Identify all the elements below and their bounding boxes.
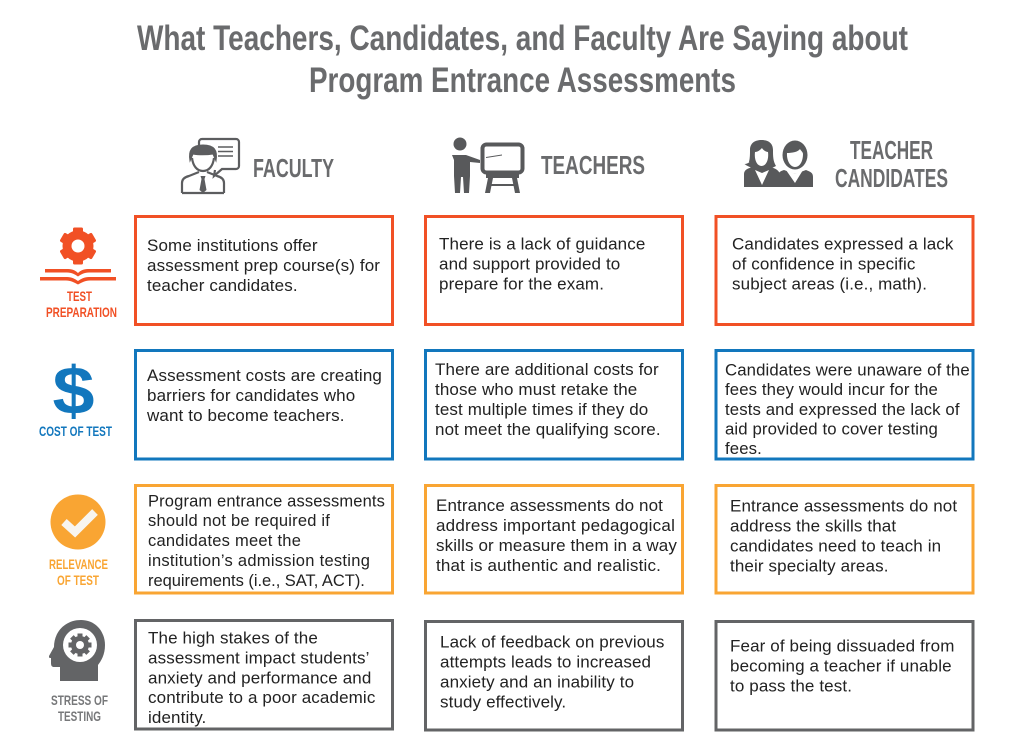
row label: cost of test bbox=[39, 353, 112, 439]
relevance of test label: RELEVANCE bbox=[49, 556, 108, 572]
panel: stress of testing / teachers: Lack of feedback on previous bbox=[440, 632, 665, 652]
icon: faculty member with speech bubble bbox=[182, 139, 239, 193]
column header: teacher candidates bbox=[744, 135, 948, 193]
icon: check mark circle bbox=[50, 494, 106, 550]
title bbox=[137, 19, 908, 100]
panel: stress of testing / faculty: contribute to a poor academic bbox=[148, 688, 376, 707]
teacher candidates label bbox=[835, 135, 948, 193]
panel: cost of test / teachers bbox=[426, 350, 682, 459]
panel: stress of testing / teachers: attempts leads to increased bbox=[440, 652, 651, 672]
panel: test preparation / teachers: and support provided to bbox=[439, 254, 620, 274]
teachers label: TEACHERS bbox=[541, 150, 645, 180]
panel: stress of testing / teachers bbox=[426, 622, 682, 730]
row label: stress of testing bbox=[49, 620, 108, 724]
panel: stress of testing / faculty bbox=[136, 620, 392, 729]
panel: test preparation / teacher candidates: Candidates expressed a lack bbox=[732, 234, 954, 254]
icon: two candidates bbox=[744, 140, 813, 187]
panel: stress of testing / teacher candidates: to pass the test. bbox=[730, 676, 852, 696]
panel: test preparation / faculty: Some institutions offer bbox=[147, 236, 318, 255]
panel: relevance of test / teacher candidates bbox=[716, 486, 973, 593]
panel: relevance of test / teachers: that is authentic and realistic. bbox=[436, 556, 661, 575]
title: Program Entrance Assessments bbox=[309, 61, 736, 100]
row label: relevance of test bbox=[49, 494, 108, 588]
panel: cost of test / faculty: want to become teachers. bbox=[146, 406, 345, 425]
panel: relevance of test / faculty: should not be required if bbox=[148, 512, 330, 530]
panel: stress of testing / faculty: identity. bbox=[148, 708, 206, 727]
panel: test preparation / teacher candidates bbox=[716, 216, 973, 324]
test preparation label bbox=[46, 288, 117, 320]
column header: teachers bbox=[452, 138, 645, 193]
relevance of test label: OF TEST bbox=[57, 572, 99, 588]
icon: head with gear bbox=[49, 620, 105, 681]
icon: teacher at board bbox=[452, 138, 522, 193]
panel: test preparation / teacher candidates: subject areas (i.e., math). bbox=[732, 274, 927, 294]
panel: relevance of test / faculty bbox=[136, 486, 392, 593]
test preparation label: TEST bbox=[67, 288, 92, 304]
test preparation label: PREPARATION bbox=[46, 304, 117, 320]
panel: relevance of test / teacher candidates: Entrance assessments do not bbox=[730, 496, 957, 516]
row label: test preparation bbox=[40, 228, 117, 320]
icon: dollar sign: $ bbox=[52, 353, 94, 429]
panel: stress of testing / teacher candidates: Fear of being dissuaded from bbox=[730, 636, 954, 656]
panel: test preparation / faculty: assessment prep course(s) for bbox=[147, 256, 380, 275]
panel: relevance of test / teachers bbox=[426, 486, 682, 593]
panel: cost of test / teachers: There are additional costs for bbox=[435, 360, 659, 379]
panel: cost of test / faculty bbox=[136, 350, 392, 459]
panel: stress of testing / teacher candidates: becoming a teacher if unable bbox=[730, 656, 952, 676]
panel: test preparation / teachers: There is a lack of guidance bbox=[439, 234, 645, 254]
stress of testing label: STRESS OF bbox=[51, 692, 108, 708]
cost of test label: COST OF TEST bbox=[39, 423, 112, 439]
relevance of test label bbox=[49, 556, 108, 588]
panel: stress of testing / faculty: The high stakes of the bbox=[148, 628, 318, 648]
panel: stress of testing / faculty: assessment impact students’ bbox=[148, 648, 370, 668]
column header: faculty bbox=[182, 139, 334, 193]
icon: gear over open book bbox=[40, 228, 116, 284]
teacher candidates label: TEACHER bbox=[850, 135, 933, 165]
panel: cost of test / teacher candidates: Candidates were unaware of the bbox=[725, 360, 970, 380]
stress of testing label: TESTING bbox=[58, 708, 101, 724]
panel: stress of testing / teacher candidates bbox=[716, 622, 973, 730]
faculty label: FACULTY bbox=[253, 153, 334, 183]
panel: stress of testing / faculty: anxiety and performance and bbox=[148, 668, 371, 688]
panel: test preparation / faculty bbox=[136, 216, 392, 324]
panel: relevance of test / teachers: skills or measure them in a way bbox=[436, 536, 677, 555]
panel: stress of testing / teachers: anxiety and an inability to bbox=[440, 672, 634, 692]
panel: cost of test / teacher candidates bbox=[716, 350, 973, 459]
stress of testing label bbox=[51, 692, 108, 724]
panel: cost of test / teacher candidates: fees they would incur for the bbox=[725, 380, 938, 399]
panel: cost of test / teachers: not meet the qualifying score. bbox=[435, 420, 661, 439]
panel: cost of test / faculty: barriers for candidates who bbox=[147, 386, 355, 405]
panel: test preparation / teachers bbox=[426, 216, 682, 324]
panel: cost of test / teacher candidates: fees. bbox=[725, 439, 762, 458]
panel: relevance of test / teacher candidates: their specialty areas. bbox=[730, 556, 889, 576]
panel: cost of test / teachers: test multiple times if they do bbox=[435, 400, 648, 419]
panel: cost of test / teacher candidates: aid provided to cover testing bbox=[725, 420, 938, 438]
panel: relevance of test / teachers: address important pedagogical bbox=[436, 516, 675, 535]
panel: stress of testing / teachers: study effectively. bbox=[440, 692, 566, 712]
panel: relevance of test / teacher candidates: candidates need to teach in bbox=[730, 536, 941, 556]
teacher candidates label: CANDIDATES bbox=[835, 163, 948, 193]
panel: cost of test / teacher candidates: tests and expressed the lack of bbox=[725, 400, 960, 419]
panel: relevance of test / teachers: Entrance assessments do not bbox=[436, 496, 663, 515]
panel: test preparation / teacher candidates: of confidence in specific bbox=[732, 254, 916, 274]
panel: relevance of test / faculty: candidates meet the bbox=[148, 532, 301, 550]
panel: relevance of test / teacher candidates: address the skills that bbox=[730, 516, 896, 536]
panel: cost of test / teachers: those who must retake the bbox=[435, 380, 637, 399]
panel: test preparation / faculty: teacher candidates. bbox=[147, 276, 298, 295]
panel: relevance of test / faculty: institution’s admission testing bbox=[148, 552, 370, 570]
panel: relevance of test / faculty: Program entrance assessments bbox=[148, 492, 385, 510]
panel: relevance of test / faculty: requirements (i.e., SAT, ACT). bbox=[148, 572, 365, 590]
panel: cost of test / faculty: Assessment costs are creating bbox=[147, 366, 382, 385]
panel: test preparation / teachers: prepare for the exam. bbox=[439, 274, 604, 294]
